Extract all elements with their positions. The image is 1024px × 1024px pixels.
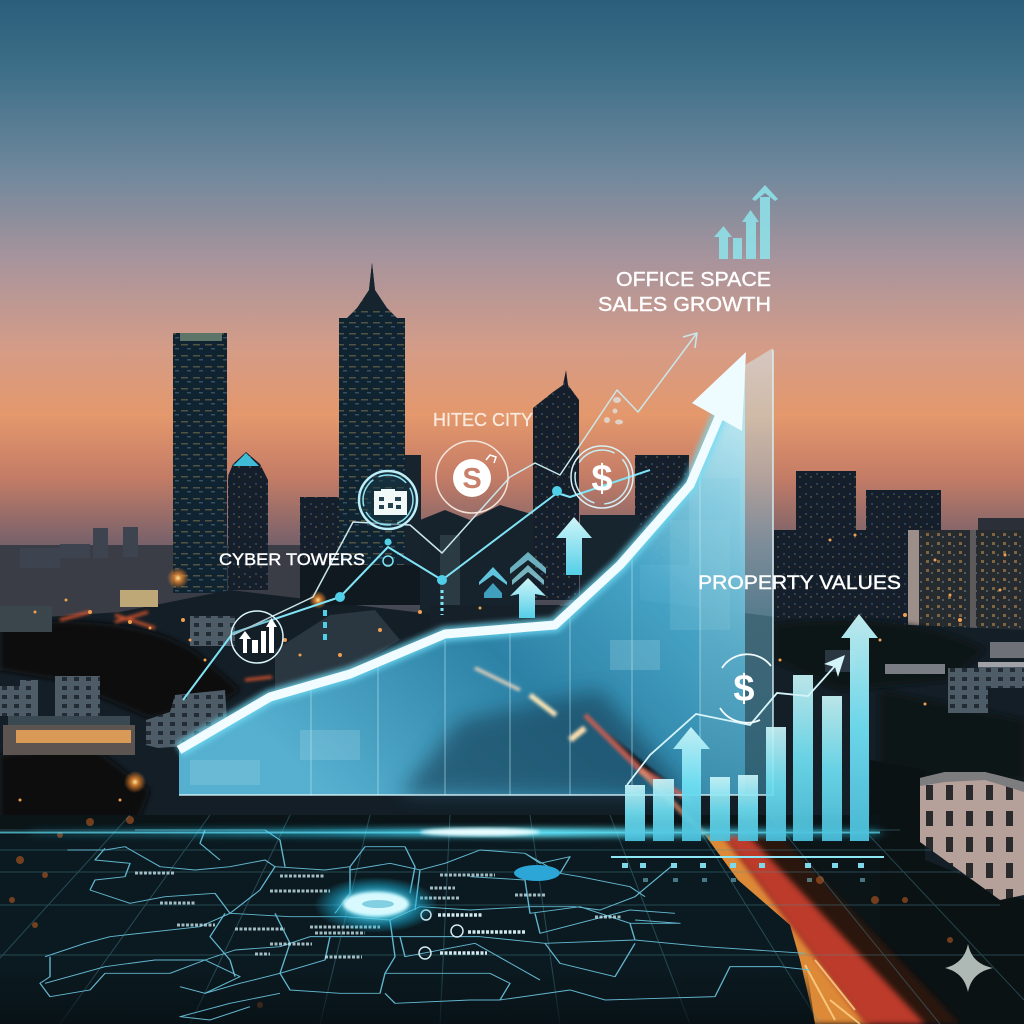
map: network of roads bbox=[40, 830, 810, 1020]
horizontal light beam bbox=[0, 828, 880, 837]
tower: mid cluster bbox=[420, 505, 535, 620]
arrow: tall bbox=[556, 517, 592, 575]
map: icon labels bbox=[419, 910, 526, 959]
trend line with arrow bbox=[627, 657, 843, 785]
ground: dark city and trees bbox=[0, 590, 1024, 1024]
building: lower right apartment bbox=[920, 772, 1024, 900]
line nodes bbox=[323, 486, 562, 640]
map: ground bbox=[0, 835, 815, 1024]
tower: right bbox=[533, 370, 579, 600]
tower: behind chart bbox=[635, 455, 689, 565]
small dots near line bbox=[604, 397, 623, 424]
distant skyline bbox=[0, 527, 340, 625]
label: CYBER TOWERS: CYBER TOWERS bbox=[219, 551, 365, 569]
map label 1 bbox=[421, 910, 482, 920]
map: blue location badge bbox=[514, 865, 560, 881]
map: label marks bbox=[135, 873, 622, 957]
axis tick labels bbox=[622, 863, 865, 882]
chart baseline bbox=[611, 856, 884, 858]
icon: dollar with arcs: $ bbox=[733, 668, 755, 710]
map label 2 bbox=[451, 925, 526, 937]
tower: left bbox=[173, 333, 227, 593]
background: dusk sky bbox=[0, 0, 1024, 620]
ground: orange specks around map bbox=[9, 816, 953, 1008]
buildings: centre low-rise bbox=[275, 535, 560, 695]
panel: dark reflection valley bbox=[400, 690, 690, 795]
road: light trails bbox=[640, 770, 960, 1024]
arrows: rising in skyline bbox=[479, 517, 592, 618]
mid-ground buildings bbox=[0, 535, 1024, 755]
icon: top-right rising bars bbox=[714, 185, 778, 259]
label: OFFICE SPACE SALES GROWTH: OFFICE SPACE bbox=[616, 268, 771, 291]
floor grid bbox=[0, 815, 1024, 1024]
arrow bar: tall bbox=[841, 614, 878, 841]
label: HITEC CITY: HITEC CITY bbox=[433, 410, 533, 430]
tower: cyan crown bbox=[228, 452, 268, 590]
floor: dark ground bbox=[0, 815, 880, 1024]
icon: dollar with arcs bbox=[720, 654, 771, 723]
line: pale trend with arrow bbox=[233, 333, 697, 635]
label: OFFICE SPACE SALES GROWTH bbox=[598, 268, 771, 316]
buildings: right low-rise bbox=[825, 642, 1024, 713]
upper line charts bbox=[183, 333, 697, 700]
panel: lighter right wedge bbox=[700, 348, 773, 795]
map: bottom fade bbox=[0, 970, 815, 1024]
icon: building circle bbox=[359, 471, 417, 529]
icon: dollar circle: $ bbox=[591, 458, 613, 500]
icon: dollar circle bbox=[571, 446, 633, 508]
city lights bbox=[18, 534, 1006, 802]
chart panel: glass area bbox=[179, 348, 773, 800]
line: cyan trend bbox=[183, 470, 650, 700]
tower: central spire bbox=[339, 263, 421, 600]
label: OFFICE SPACE SALES GROWTH: SALES GROWTH bbox=[598, 293, 771, 316]
skyline: city towers bbox=[173, 263, 1024, 641]
icon: sparkle watermark bbox=[945, 944, 993, 992]
label: PROPERTY VALUES: PROPERTY VALUES bbox=[698, 573, 901, 594]
icon: S coin circle bbox=[436, 441, 508, 513]
tower: right group bbox=[774, 471, 1024, 641]
tower: small mid bbox=[300, 497, 340, 592]
arrow bar: small bbox=[673, 727, 710, 841]
panel: building reflections bbox=[190, 520, 730, 785]
map: glowing location marker bbox=[314, 877, 438, 933]
panel: road reflections bbox=[475, 668, 690, 800]
buildings: left low-rise bbox=[0, 590, 235, 755]
arrow: with chevrons bbox=[510, 552, 546, 618]
map label 3 bbox=[419, 947, 487, 959]
panel: vertical gridlines bbox=[311, 470, 700, 795]
bar chart: property values bbox=[611, 614, 884, 882]
bars bbox=[625, 675, 842, 841]
icon: bar chart circle bbox=[231, 611, 283, 663]
icon: S coin circle: S bbox=[462, 463, 482, 495]
growth curve with arrowhead bbox=[179, 352, 746, 750]
arrow: small chevron bbox=[479, 567, 507, 598]
